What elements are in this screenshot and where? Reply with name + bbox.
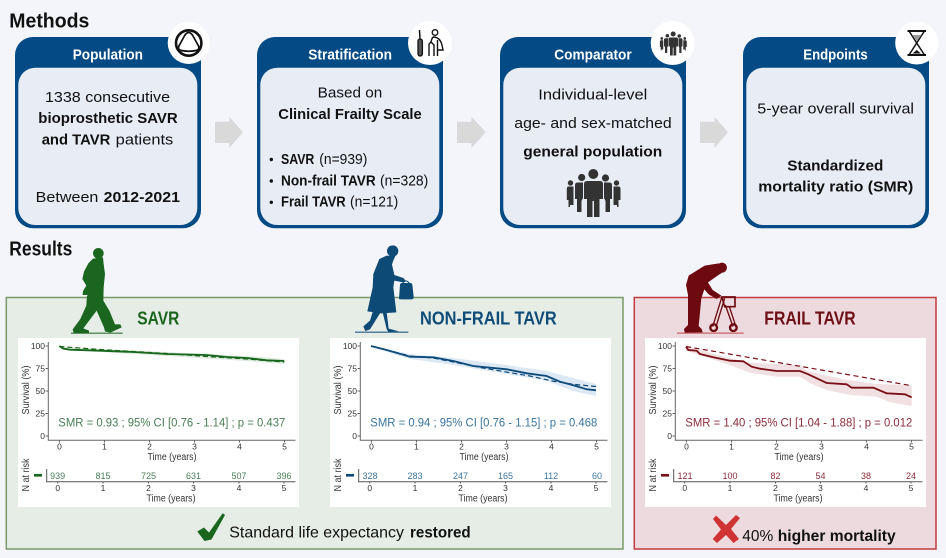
chart: non-frail TAVR survival: 3 <box>504 442 509 452</box>
chart: frail TAVR survival <box>645 338 926 507</box>
text: population description: and TAVR <box>42 132 110 148</box>
chart: non-frail TAVR survival: Time (years) <box>458 494 508 504</box>
callout: 40% higher mortality: higher mortality <box>778 528 896 545</box>
icon: green check mark <box>197 513 225 541</box>
header: Endpoints: Endpoints <box>803 46 868 63</box>
text: general population: Individual-level <box>538 86 647 103</box>
chart: SAVR survival: 4 <box>237 442 242 452</box>
chart: SAVR survival: Time (years) <box>148 452 196 463</box>
chart: non-frail TAVR survival: 5 <box>594 483 599 493</box>
chart: non-frail TAVR survival: 0 <box>352 431 357 441</box>
panel: Population <box>15 22 210 228</box>
heading: Methods: Methods <box>9 11 89 33</box>
chart: SAVR survival: 3 <box>192 442 197 452</box>
text: Clinical Frailty Scale: Clinical Frailty Scale <box>278 106 422 123</box>
chart: non-frail TAVR survival: Time (years) <box>460 452 508 463</box>
text: Clinical Frailty Scale <box>278 85 422 123</box>
chart: SAVR survival: 1 <box>102 442 107 452</box>
list: patient groups: Frail TAVR <box>281 194 346 211</box>
chart: frail TAVR survival: 25 <box>663 408 672 418</box>
chart: frail TAVR survival: 75 <box>663 364 672 374</box>
text: endpoints list: 5-year overall survival <box>757 100 914 117</box>
chart: non-frail TAVR survival: 3 <box>503 483 508 493</box>
chart: non-frail TAVR survival: 60 <box>592 471 602 481</box>
chart: non-frail TAVR survival: 2 <box>458 483 463 493</box>
chart: frail TAVR survival: 50 <box>663 386 672 396</box>
list: patient groups <box>270 151 428 211</box>
text: population description <box>36 89 180 206</box>
arrow: population to stratification <box>215 117 243 148</box>
chart: SAVR survival: 631 <box>186 471 201 481</box>
chart: frail TAVR survival: Time (years) <box>774 452 824 463</box>
chart: non-frail TAVR survival: N at risk <box>333 458 344 492</box>
chart: non-frail TAVR survival: 247 <box>453 471 468 481</box>
chart: non-frail TAVR survival: 4 <box>549 442 554 452</box>
chart: frail TAVR survival: 0 <box>667 431 672 441</box>
chart: SAVR survival: 50 <box>36 386 45 396</box>
heading: Frail TAVR: FRAIL TAVR <box>764 309 856 329</box>
chart: non-frail TAVR survival: SMR = 0.94 ; 95% CI [0.76 - 1.15] ; p = 0.468 <box>370 418 597 430</box>
chart: frail TAVR survival: 2 <box>773 483 778 493</box>
text: Clinical Frailty Scale: Based on <box>318 85 382 102</box>
text: population description: 1338 consecutive <box>45 89 170 106</box>
chart: non-frail TAVR survival: 1 <box>414 442 419 452</box>
chart: SAVR survival: 1 <box>101 483 106 493</box>
chart: non-frail TAVR survival: 25 <box>348 408 357 418</box>
chart: frail TAVR survival: 1 <box>728 483 733 493</box>
chart: SAVR survival: 5 <box>282 442 287 452</box>
chart: frail TAVR survival: 5 <box>909 483 914 493</box>
chart: SAVR survival: 2 <box>146 483 151 493</box>
text: general population: age- and sex-matched <box>514 115 672 132</box>
chart: non-frail TAVR survival: 5 <box>594 442 599 452</box>
chart: frail TAVR survival: 54 <box>815 471 826 481</box>
callout: standard life expectancy restored: restored <box>410 525 471 542</box>
panel: frail TAVR background <box>634 298 936 549</box>
chart: SAVR survival: 939 <box>50 471 65 481</box>
chart: SAVR survival: 25 <box>36 408 45 418</box>
header: Stratification: Stratification <box>308 46 392 63</box>
chart: SAVR survival: SMR = 0.93 ; 95% CI [0.76 - 1.14] ; p = 0.437 <box>58 418 285 430</box>
icon: valve <box>168 22 210 64</box>
callout: standard life expectancy restored: Standard life expectancy <box>229 525 404 542</box>
chart: SAVR survival: Time (years) <box>146 494 196 504</box>
chart: SAVR survival: 4 <box>237 483 242 493</box>
list: patient groups: Non-frail TAVR <box>281 172 376 189</box>
chart: frail TAVR survival: Survival (%) <box>648 366 659 414</box>
icon: woman with handbag <box>355 245 414 333</box>
panel: Stratification <box>257 21 452 228</box>
panel: SAVR and non-frail TAVR background <box>6 298 623 549</box>
chart: non-frail TAVR survival: 283 <box>407 471 423 481</box>
chart: SAVR survival: 3 <box>191 483 196 493</box>
arrow: stratification to comparator <box>457 117 486 148</box>
chart: non-frail TAVR survival: 1 <box>413 483 418 493</box>
chart: non-frail TAVR survival: Survival (%) <box>333 366 344 414</box>
chart: frail TAVR survival: 100 <box>722 471 738 481</box>
header: Comparator: Comparator <box>554 46 632 63</box>
list: patient groups: SAVR <box>281 151 314 168</box>
chart: frail TAVR survival: 4 <box>864 442 869 452</box>
chart: frail TAVR survival: Time (years) <box>774 494 822 504</box>
chart: non-frail TAVR survival: 0 <box>369 442 374 452</box>
chart: frail TAVR survival: 24 <box>906 471 916 481</box>
chart: SAVR survival: 100 <box>31 341 45 351</box>
chart: frail TAVR survival: 2 <box>774 442 779 452</box>
chart: frail TAVR survival: 0 <box>682 483 687 493</box>
chart: non-frail TAVR survival: 50 <box>348 386 357 396</box>
chart: SAVR survival: 2 <box>147 442 152 452</box>
chart: frail TAVR survival: 100 <box>658 341 672 351</box>
arrow: comparator to endpoints <box>700 117 728 148</box>
text: endpoints list: mortality ratio (SMR) <box>758 179 913 196</box>
chart: SAVR survival <box>18 338 299 507</box>
chart: non-frail TAVR survival: 0 <box>367 483 372 493</box>
text: general population <box>514 86 672 161</box>
heading: Results: Results <box>9 238 72 260</box>
panel: Endpoints <box>743 22 938 228</box>
chart: frail TAVR survival: 3 <box>819 442 824 452</box>
chart: non-frail TAVR survival: 165 <box>498 471 513 481</box>
chart: frail TAVR survival: 4 <box>864 483 869 493</box>
chart: frail TAVR survival: N at risk <box>648 458 659 492</box>
chart: non-frail TAVR survival: 328 <box>362 471 378 481</box>
text: endpoints list: Standardized <box>787 158 883 175</box>
icon: walking man <box>71 248 123 334</box>
chart: frail TAVR survival: 5 <box>909 442 914 452</box>
chart: SAVR survival: 725 <box>141 471 156 481</box>
heading: SAVR: SAVR <box>137 309 179 329</box>
chart: non-frail TAVR survival: 4 <box>549 483 554 493</box>
chart: SAVR survival: 5 <box>282 483 287 493</box>
header: Population: Population <box>73 46 143 63</box>
text: population description: patients <box>116 132 173 148</box>
chart: frail TAVR survival: 1 <box>729 442 734 452</box>
chart: SAVR survival: 396 <box>276 471 292 481</box>
text: population description: bioprosthetic SAVR <box>38 110 178 127</box>
chart: frail TAVR survival: SMR = 1.40 ; 95% CI [1.04 - 1.88] ; p = 0.012 <box>685 418 912 430</box>
chart: frail TAVR survival: 38 <box>861 471 871 481</box>
chart: non-frail TAVR survival: 100 <box>343 341 357 351</box>
chart: SAVR survival: Survival (%) <box>21 366 32 414</box>
chart: SAVR survival: 75 <box>36 364 45 374</box>
chart: SAVR survival: 0 <box>40 431 45 441</box>
icon: frailty scale <box>408 21 452 65</box>
icon: hourglass <box>895 22 938 64</box>
icon: large crowd <box>567 169 620 217</box>
chart: non-frail TAVR survival <box>330 338 611 507</box>
text: general population: general population <box>523 144 662 161</box>
icon: frail man with rollator <box>677 263 744 333</box>
icon: red cross mark <box>713 515 740 543</box>
chart: frail TAVR survival: 0 <box>684 442 689 452</box>
chart: frail TAVR survival: 121 <box>677 471 693 481</box>
text: endpoints list <box>757 100 914 196</box>
list: patient groups: (n=121) <box>350 194 398 211</box>
list: patient groups: (n=328) <box>380 172 428 189</box>
chart: non-frail TAVR survival: 2 <box>459 442 464 452</box>
chart: SAVR survival: 0 <box>55 483 60 493</box>
panel: Comparator <box>500 21 695 228</box>
chart: non-frail TAVR survival: 75 <box>348 364 357 374</box>
icon: small crowd <box>651 21 695 65</box>
chart: non-frail TAVR survival: 112 <box>544 471 558 481</box>
list: patient groups: (n=939) <box>319 151 367 168</box>
chart: SAVR survival: N at risk <box>21 458 32 492</box>
chart: SAVR survival: 507 <box>231 471 247 481</box>
chart: SAVR survival: 0 <box>57 442 62 452</box>
callout: 40% higher mortality: 40% <box>742 528 773 545</box>
text: population description: Between <box>36 189 98 206</box>
chart: frail TAVR survival: 82 <box>770 471 781 481</box>
text: population description: 2012-2021 <box>104 189 180 206</box>
chart: SAVR survival: 815 <box>95 471 111 481</box>
chart: frail TAVR survival: 3 <box>818 483 823 493</box>
heading: Non-frail TAVR: NON-FRAIL TAVR <box>420 309 557 329</box>
